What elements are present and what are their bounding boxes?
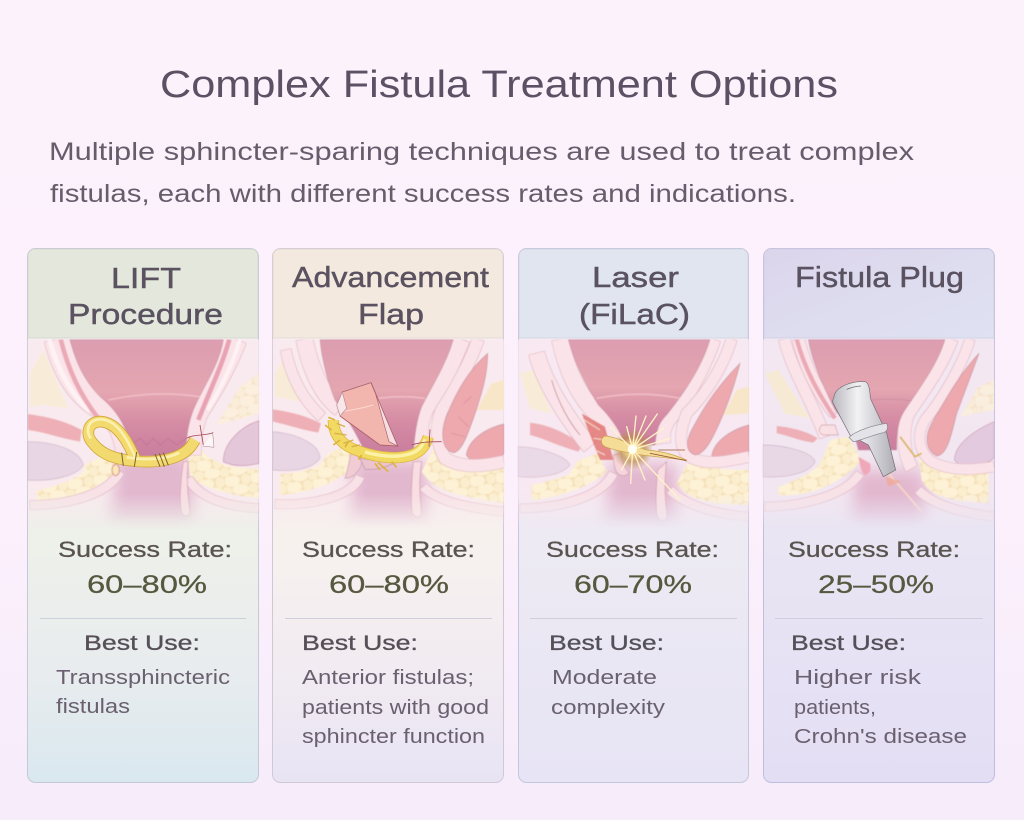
best use text: fistulas xyxy=(56,696,130,718)
best use text: Moderate xyxy=(552,667,657,689)
heading xyxy=(579,262,690,331)
card header xyxy=(28,249,258,338)
rate value: 60–80% xyxy=(87,571,207,599)
panel: fistula plug xyxy=(763,248,994,782)
best use text: sphincter function xyxy=(302,726,485,748)
card header xyxy=(519,249,748,338)
heading: (FiLaC) xyxy=(579,299,690,331)
success rate: Success Rate: xyxy=(546,537,719,562)
heading xyxy=(292,262,489,331)
heading: Flap xyxy=(358,299,424,331)
illustration: LIFT seton in fistula tract xyxy=(28,339,259,530)
heading: Procedure xyxy=(68,299,223,331)
illustration: advancement flap xyxy=(273,339,504,530)
card body xyxy=(28,248,258,782)
success rate: Success Rate: xyxy=(58,537,232,562)
heading xyxy=(68,263,223,331)
intro text: fistulas, each with different success rates and indications. xyxy=(50,180,796,208)
best use heading: Best Use: xyxy=(549,632,664,655)
best use text: patients with good xyxy=(302,697,489,719)
title: Complex Fistula Treatment Options xyxy=(160,64,838,106)
illustration: fistula plug xyxy=(763,339,994,530)
best use heading: Best Use: xyxy=(302,632,418,655)
panel: laser FiLaC xyxy=(518,248,749,782)
best use text xyxy=(794,667,967,748)
best use heading: Best Use: xyxy=(84,632,200,655)
best use text: complexity xyxy=(551,697,665,719)
intro text: Multiple sphincter-sparing techniques are used to treat complex xyxy=(49,138,915,166)
rate value: 25–50% xyxy=(818,571,934,599)
best use text xyxy=(551,667,665,719)
intro text xyxy=(49,138,915,208)
card body xyxy=(518,248,748,782)
card header xyxy=(764,249,994,338)
best use text: Crohn's disease xyxy=(794,726,967,748)
heading: Advancement xyxy=(292,262,489,294)
best use text xyxy=(56,667,230,718)
best use text xyxy=(302,667,489,748)
panel: advancement flap xyxy=(272,248,504,782)
success rate: Success Rate: xyxy=(788,537,960,562)
card body xyxy=(764,248,994,782)
best use text: Higher risk xyxy=(794,667,922,689)
heading: Fistula Plug xyxy=(795,262,964,294)
best use text: Anterior fistulas; xyxy=(302,667,474,689)
best use text: Transsphincteric xyxy=(56,667,230,689)
panel: LIFT procedure xyxy=(28,248,259,782)
card body xyxy=(272,248,504,782)
rate value: 60–70% xyxy=(574,571,692,599)
success rate: Success Rate: xyxy=(302,537,475,562)
card header xyxy=(273,249,503,338)
heading: LIFT xyxy=(111,263,181,295)
best use text: patients, xyxy=(794,697,876,719)
heading: Laser xyxy=(592,262,679,294)
rate value: 60–80% xyxy=(329,571,449,599)
best use heading: Best Use: xyxy=(791,632,906,655)
illustration: laser probe xyxy=(518,339,749,530)
